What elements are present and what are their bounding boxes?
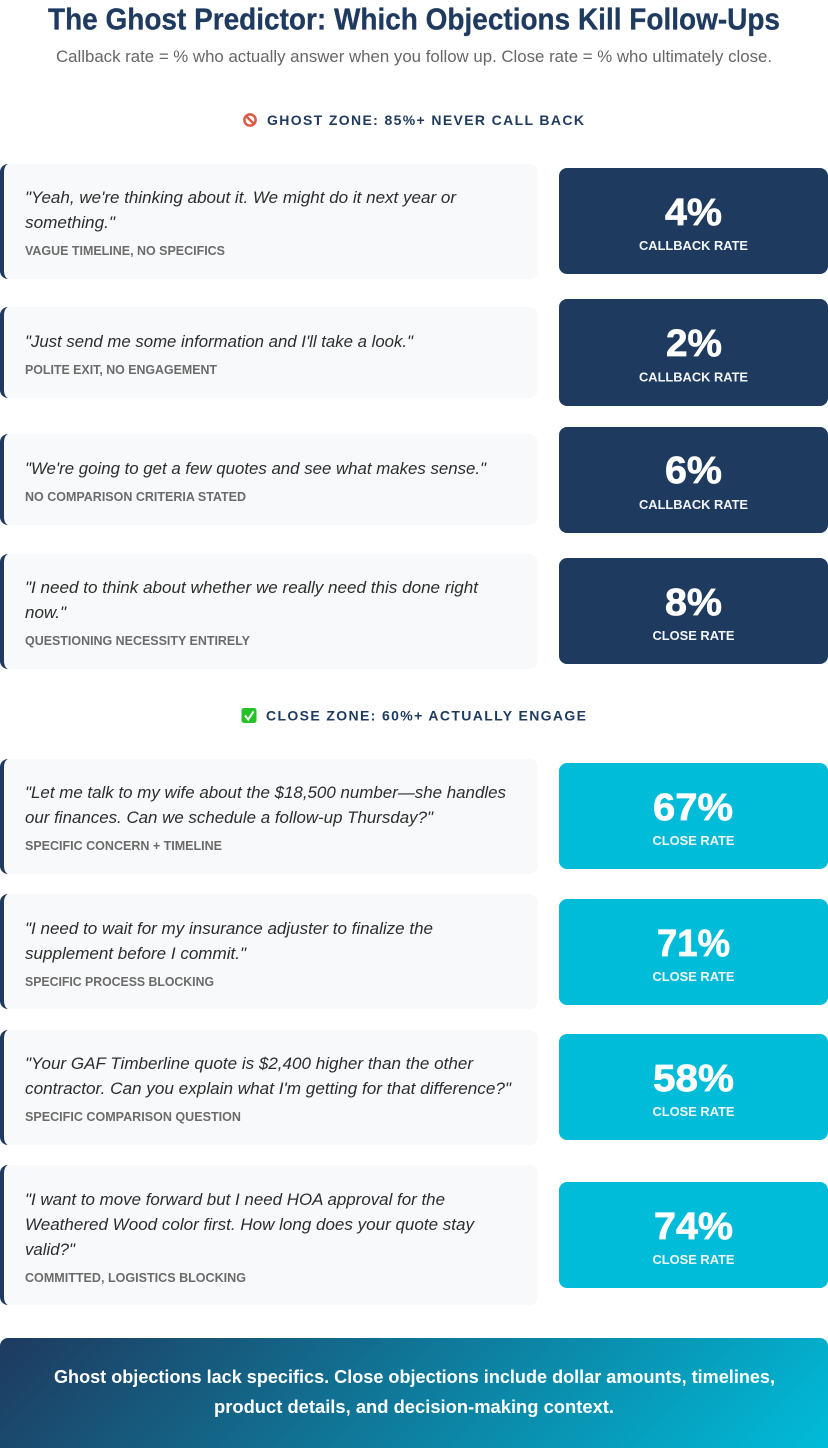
row 8: objection card: valid?" xyxy=(25,1240,76,1259)
row 6: objection card: SPECIFIC PROCESS BLOCKING xyxy=(25,975,214,989)
row 5: stat: CLOSE RATE xyxy=(652,833,735,848)
row 4: objection card xyxy=(0,554,538,669)
row 8: stat: CLOSE RATE xyxy=(652,1252,735,1267)
row 7: objection card: "Your GAF Timberline quote is $2,400 higher than the other xyxy=(25,1054,474,1073)
row 3: objection card: "We're going to get a few quotes and see what makes sense." xyxy=(25,459,487,478)
row 5: objection card: "Let me talk to my wife about the $18,500 number—she handles xyxy=(25,783,506,802)
row 2: stat: 2% xyxy=(666,323,722,365)
row 7: stat: CLOSE RATE xyxy=(652,1104,735,1119)
row 1: stat xyxy=(559,168,828,274)
heading: close zone: CLOSE ZONE: 60%+ ACTUALLY ENGAGE xyxy=(266,708,586,724)
row 2: objection card: "Just send me some information and I'll take a look." xyxy=(25,332,414,351)
row 5: stat: 67% xyxy=(653,787,733,829)
icon: check mark xyxy=(242,708,256,723)
icon: prohibited sign xyxy=(244,114,256,126)
summary banner: product details, and decision-making context. xyxy=(214,1396,614,1417)
row 6: objection card: "I need to wait for my insurance adjuster to finalize the xyxy=(25,919,433,938)
row 4: stat: CLOSE RATE xyxy=(652,628,735,643)
row 1: stat: CALLBACK RATE xyxy=(639,238,748,253)
row 6: stat: CLOSE RATE xyxy=(652,969,735,984)
summary banner xyxy=(0,1338,828,1448)
row 4: objection card: now." xyxy=(25,603,67,622)
row 4: objection card: "I need to think about whether we really need this done right xyxy=(25,578,479,597)
row 2: objection card xyxy=(0,307,538,398)
row 7: stat: 58% xyxy=(653,1058,734,1100)
row 8: objection card: COMMITTED, LOGISTICS BLOCKING xyxy=(25,1271,246,1285)
row 1: stat: 4% xyxy=(665,192,722,234)
row 7: objection card xyxy=(0,1030,538,1145)
row 8: stat xyxy=(559,1182,828,1288)
row 2: stat xyxy=(559,299,828,406)
row 7: objection card: contractor. Can you explain what I'm getting for that difference?" xyxy=(25,1079,512,1098)
row 6: stat xyxy=(559,899,828,1005)
row 7: objection card: SPECIFIC COMPARISON QUESTION xyxy=(25,1110,241,1124)
row 4: stat: 8% xyxy=(665,582,722,624)
row 8: objection card xyxy=(0,1165,538,1305)
row 8: objection card: Weathered Wood color first. How long does your quote stay xyxy=(25,1215,475,1234)
summary banner: Ghost objections lack specifics. Close objections include dollar amounts, timelines, xyxy=(54,1366,775,1387)
row 3: objection card xyxy=(0,434,538,525)
row 7: stat xyxy=(559,1034,828,1140)
row 6: objection card xyxy=(0,894,538,1009)
heading: ghost zone: GHOST ZONE: 85%+ NEVER CALL BACK xyxy=(267,112,584,128)
row 5: objection card: SPECIFIC CONCERN + TIMELINE xyxy=(25,839,222,853)
row 6: objection card: supplement before I commit." xyxy=(25,944,247,963)
row 2: objection card: POLITE EXIT, NO ENGAGEMENT xyxy=(25,363,217,377)
row 5: objection card xyxy=(0,759,538,874)
row 5: objection card: our finances. Can we schedule a follow-up Thursday?" xyxy=(25,808,434,827)
row 3: objection card: NO COMPARISON CRITERIA STATED xyxy=(25,490,246,504)
row 4: stat xyxy=(559,558,828,664)
row 3: stat: CALLBACK RATE xyxy=(639,497,748,512)
subtitle: Callback rate = % who actually answer when you follow up. Close rate = % who ultimately close. xyxy=(56,47,772,66)
row 1: objection card: "Yeah, we're thinking about it. We might do it next year or xyxy=(25,188,457,207)
row 8: objection card: "I want to move forward but I need HOA approval for the xyxy=(25,1190,445,1209)
row 5: stat xyxy=(559,763,828,869)
row 1: objection card: something." xyxy=(25,213,116,232)
row 6: stat: 71% xyxy=(657,923,730,965)
row 3: stat: 6% xyxy=(665,450,722,492)
row 8: stat: 74% xyxy=(654,1206,733,1248)
row 1: objection card: VAGUE TIMELINE, NO SPECIFICS xyxy=(25,244,225,258)
row 2: stat: CALLBACK RATE xyxy=(639,370,748,384)
row 3: stat xyxy=(559,427,828,533)
row 1: objection card xyxy=(0,164,538,279)
row 4: objection card: QUESTIONING NECESSITY ENTIRELY xyxy=(25,634,251,648)
